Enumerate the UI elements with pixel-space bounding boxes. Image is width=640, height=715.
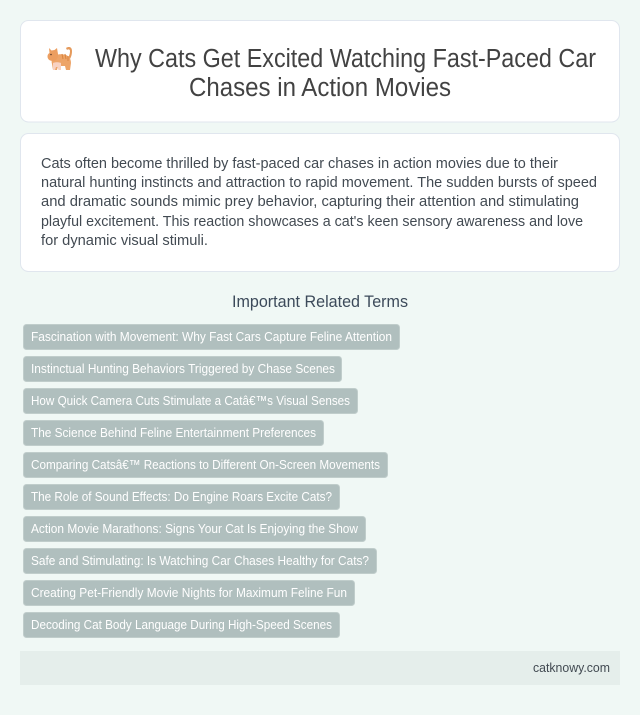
tag 5	[24, 452, 388, 478]
text block: description: playful excitement. This reaction showcases a cat's keen sensory awareness and love	[41, 213, 583, 230]
tag 10: Decoding Cat Body Language During High-Speed Scenes	[31, 617, 332, 632]
tag 1: Fascination with Movement: Why Fast Cars Capture Feline Attention	[31, 329, 392, 344]
footer source text: catknowy.com	[533, 660, 610, 675]
tag 8: Safe and Stimulating: Is Watching Car Chases Healthy for Cats?	[31, 553, 369, 568]
tag 5: Comparing Catsâ€™ Reactions to Different On-Screen Movements	[31, 457, 380, 472]
tag 2	[24, 356, 342, 382]
tag 7	[24, 516, 366, 542]
text block: description: Cats often become thrilled by fast-paced car chases in action movies due to their	[41, 155, 558, 172]
tag 3	[24, 388, 358, 414]
text block: description: and dramatic sounds mimic prey behavior, capturing their attention and stimulating	[41, 193, 579, 210]
tag 6	[24, 484, 340, 510]
tag 2: Instinctual Hunting Behaviors Triggered by Chase Scenes	[31, 361, 335, 376]
tag 4: The Science Behind Feline Entertainment Preferences	[31, 425, 316, 440]
title	[95, 45, 596, 102]
heading: related terms: Important Related Terms	[232, 293, 408, 311]
footer	[20, 651, 620, 685]
list: related term tags	[24, 324, 400, 638]
title: Why Cats Get Excited Watching Fast-Paced Car	[95, 45, 596, 73]
tag 10	[24, 612, 340, 638]
tag 4	[24, 420, 324, 446]
text block: description	[41, 155, 597, 249]
tag 1	[24, 324, 400, 350]
icon: cat	[48, 47, 72, 70]
panel: title card	[20, 20, 620, 122]
tag 6: The Role of Sound Effects: Do Engine Roars Excite Cats?	[31, 489, 332, 504]
tag 8	[24, 548, 376, 574]
tag 9	[24, 580, 354, 606]
tag 7: Action Movie Marathons: Signs Your Cat Is Enjoying the Show	[31, 521, 359, 536]
panel: description card	[20, 134, 620, 272]
tag 9: Creating Pet-Friendly Movie Nights for Maximum Feline Fun	[31, 585, 347, 600]
text block: description: for dynamic visual stimuli.	[41, 232, 208, 249]
tag 3: How Quick Camera Cuts Stimulate a Catâ€™s Visual Senses	[31, 393, 350, 408]
text block: description: natural hunting instincts and attraction to rapid movement. The sudden bursts of speed	[41, 174, 597, 191]
title: Chases in Action Movies	[189, 74, 451, 102]
